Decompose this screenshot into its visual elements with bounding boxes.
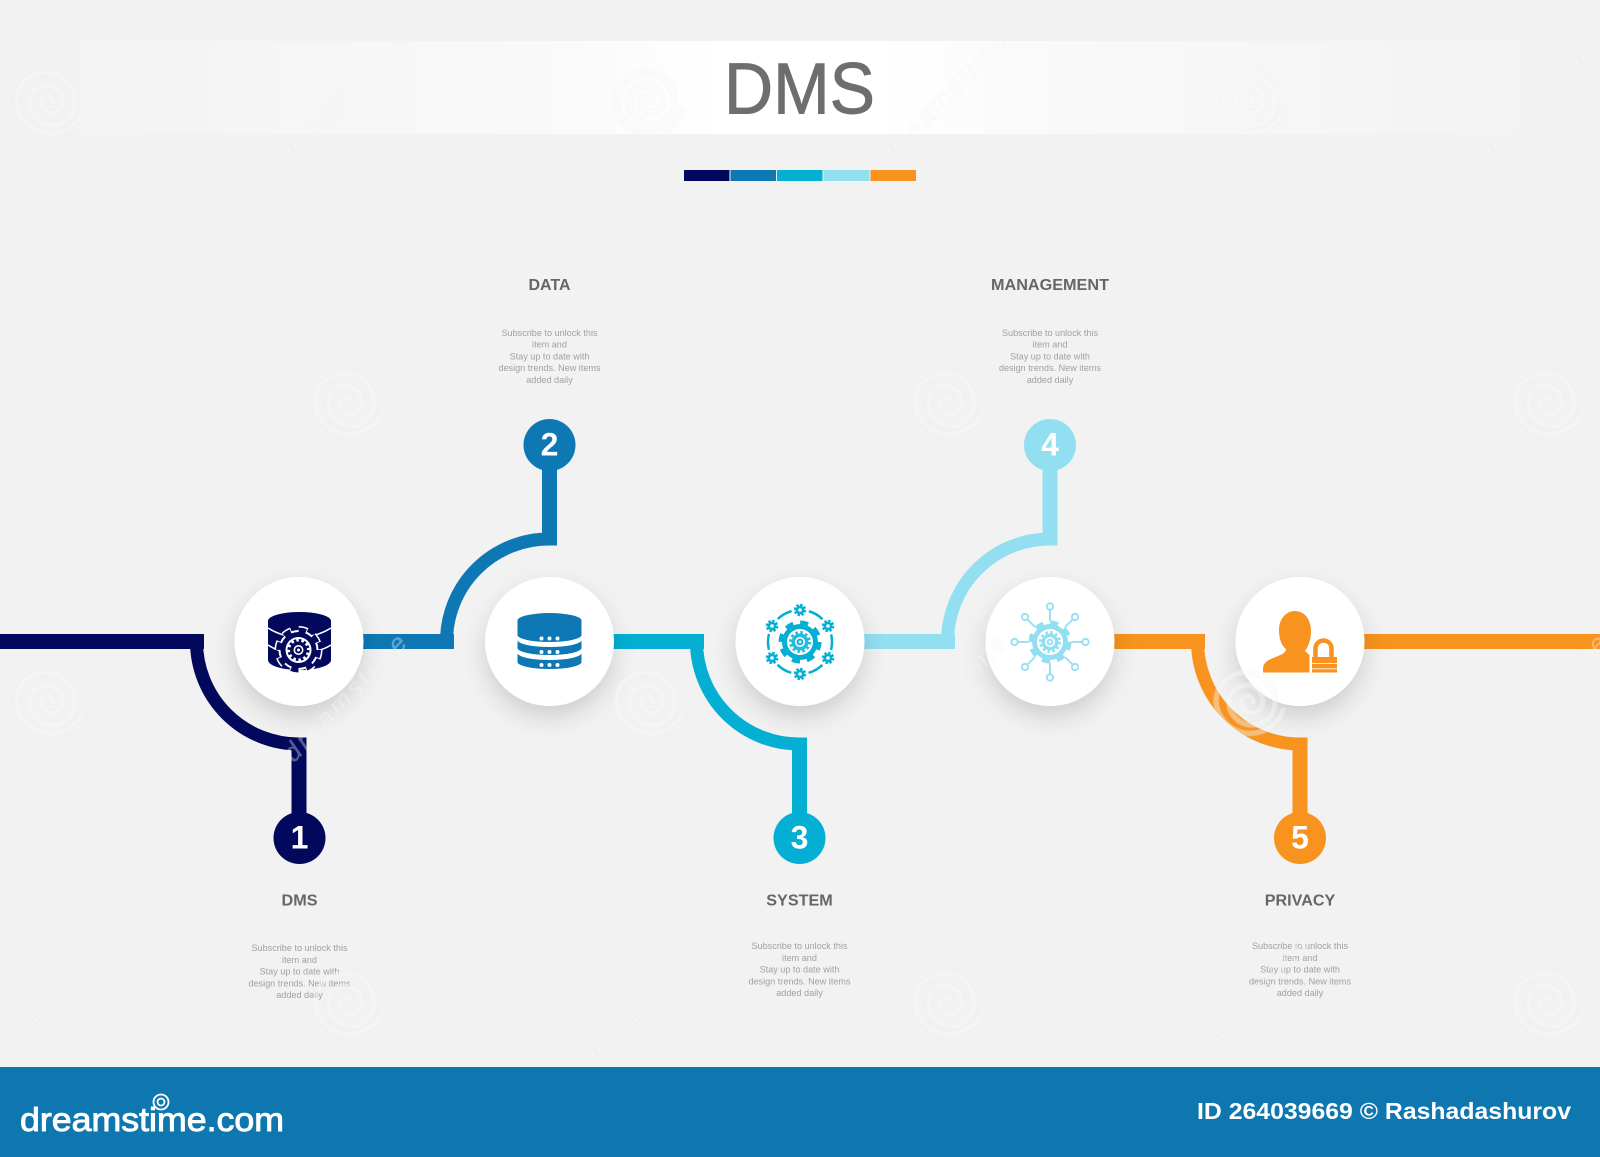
white circle 3 xyxy=(736,577,864,706)
description 5: item and xyxy=(1283,953,1317,963)
heading: DATA: DATA xyxy=(528,277,570,294)
description 5: added daily xyxy=(1277,988,1324,998)
watermark overlay: dreamstime xyxy=(580,929,717,1069)
description 4: item and xyxy=(1033,340,1067,350)
connector: step 2 blue xyxy=(299,445,550,642)
description 2: added daily xyxy=(526,375,573,385)
description 2: Stay up to date with xyxy=(510,351,589,361)
number 5: 5 xyxy=(1291,820,1309,856)
description 3: design trends. New items xyxy=(748,976,851,986)
white circle 2 xyxy=(485,577,614,706)
description 1: Subscribe to unlock this xyxy=(251,943,348,953)
watermark overlay: dreamstime xyxy=(276,26,413,166)
description 1: design trends. New items xyxy=(248,978,351,988)
number badge 2 xyxy=(524,419,576,471)
number badge 1 xyxy=(274,812,326,864)
title: DMS xyxy=(724,50,875,130)
number badge 3 xyxy=(774,812,826,864)
footer bar xyxy=(0,1067,1600,1157)
description 4: Stay up to date with xyxy=(1010,351,1090,361)
white circle 1 xyxy=(234,577,364,706)
description 4: design trends. New items xyxy=(999,363,1101,373)
step 1: DMS xyxy=(234,577,364,1000)
description 5: Stay up to date with xyxy=(1260,965,1340,975)
icon: database with gear xyxy=(268,612,331,672)
number 3: 3 xyxy=(791,820,808,856)
description 3: added daily xyxy=(776,988,823,998)
watermark overlay: dreamstime xyxy=(1179,929,1316,1069)
connector: step 1 navy xyxy=(0,642,299,838)
description 3: Subscribe to unlock this xyxy=(751,941,848,951)
heading: MANAGEMENT: MANAGEMENT xyxy=(991,277,1110,294)
watermark overlay: dreamstime xyxy=(580,327,717,467)
icon: logo spiral xyxy=(154,1094,168,1110)
description 4: Subscribe to unlock this xyxy=(1002,328,1098,338)
step 5: PRIVACY xyxy=(1236,577,1364,998)
description 2: Subscribe to unlock this xyxy=(501,328,598,338)
number 4: 4 xyxy=(1041,426,1059,462)
connector: step 4 light blue xyxy=(799,445,1050,642)
watermark overlay: dreamstime xyxy=(876,628,1013,768)
icon: gear with orbiting gears xyxy=(767,605,833,679)
footer logo text: dreamstime.com xyxy=(20,1101,284,1138)
title band xyxy=(40,41,1560,134)
description 4: added daily xyxy=(1027,375,1074,385)
description 3: Stay up to date with xyxy=(760,965,839,975)
icon: person with padlock xyxy=(1263,611,1337,672)
description 1: Stay up to date with xyxy=(260,967,339,977)
connector: outgoing orange line xyxy=(1300,634,1600,649)
white circle 4 xyxy=(986,577,1114,706)
description 5: design trends. New items xyxy=(1249,976,1351,986)
watermark overlay: dreamstime xyxy=(276,628,413,768)
heading: SYSTEM: SYSTEM xyxy=(766,892,833,910)
description 1: item and xyxy=(282,955,317,965)
icon: database xyxy=(518,613,582,669)
white circle 5 xyxy=(1236,577,1364,706)
connector: step 3 cyan xyxy=(549,642,800,838)
heading: PRIVACY: PRIVACY xyxy=(1265,892,1336,910)
step 2: DATA xyxy=(485,277,614,706)
description 5: Subscribe to unlock this xyxy=(1252,941,1348,951)
connector: step 5 orange xyxy=(1050,642,1300,838)
watermark overlay: dreamstime xyxy=(876,26,1013,166)
description 3: item and xyxy=(782,953,817,963)
number 2: 2 xyxy=(541,426,558,462)
description 2: design trends. New items xyxy=(498,363,601,373)
step 4: MANAGEMENT xyxy=(986,277,1114,706)
number 1: 1 xyxy=(291,820,308,856)
colour key bar xyxy=(684,170,916,181)
footer credit: ID 264039669 © Rashadashurov xyxy=(1197,1098,1571,1124)
step 3: SYSTEM xyxy=(736,577,864,998)
description 2: item and xyxy=(532,340,567,350)
heading: DMS: DMS xyxy=(282,892,318,910)
number badge 4 xyxy=(1024,419,1076,471)
description 1: added daily xyxy=(276,990,323,1000)
watermark overlay: dreamstime xyxy=(1179,327,1316,467)
number badge 5 xyxy=(1274,812,1326,864)
icon: gear network xyxy=(1011,603,1089,681)
